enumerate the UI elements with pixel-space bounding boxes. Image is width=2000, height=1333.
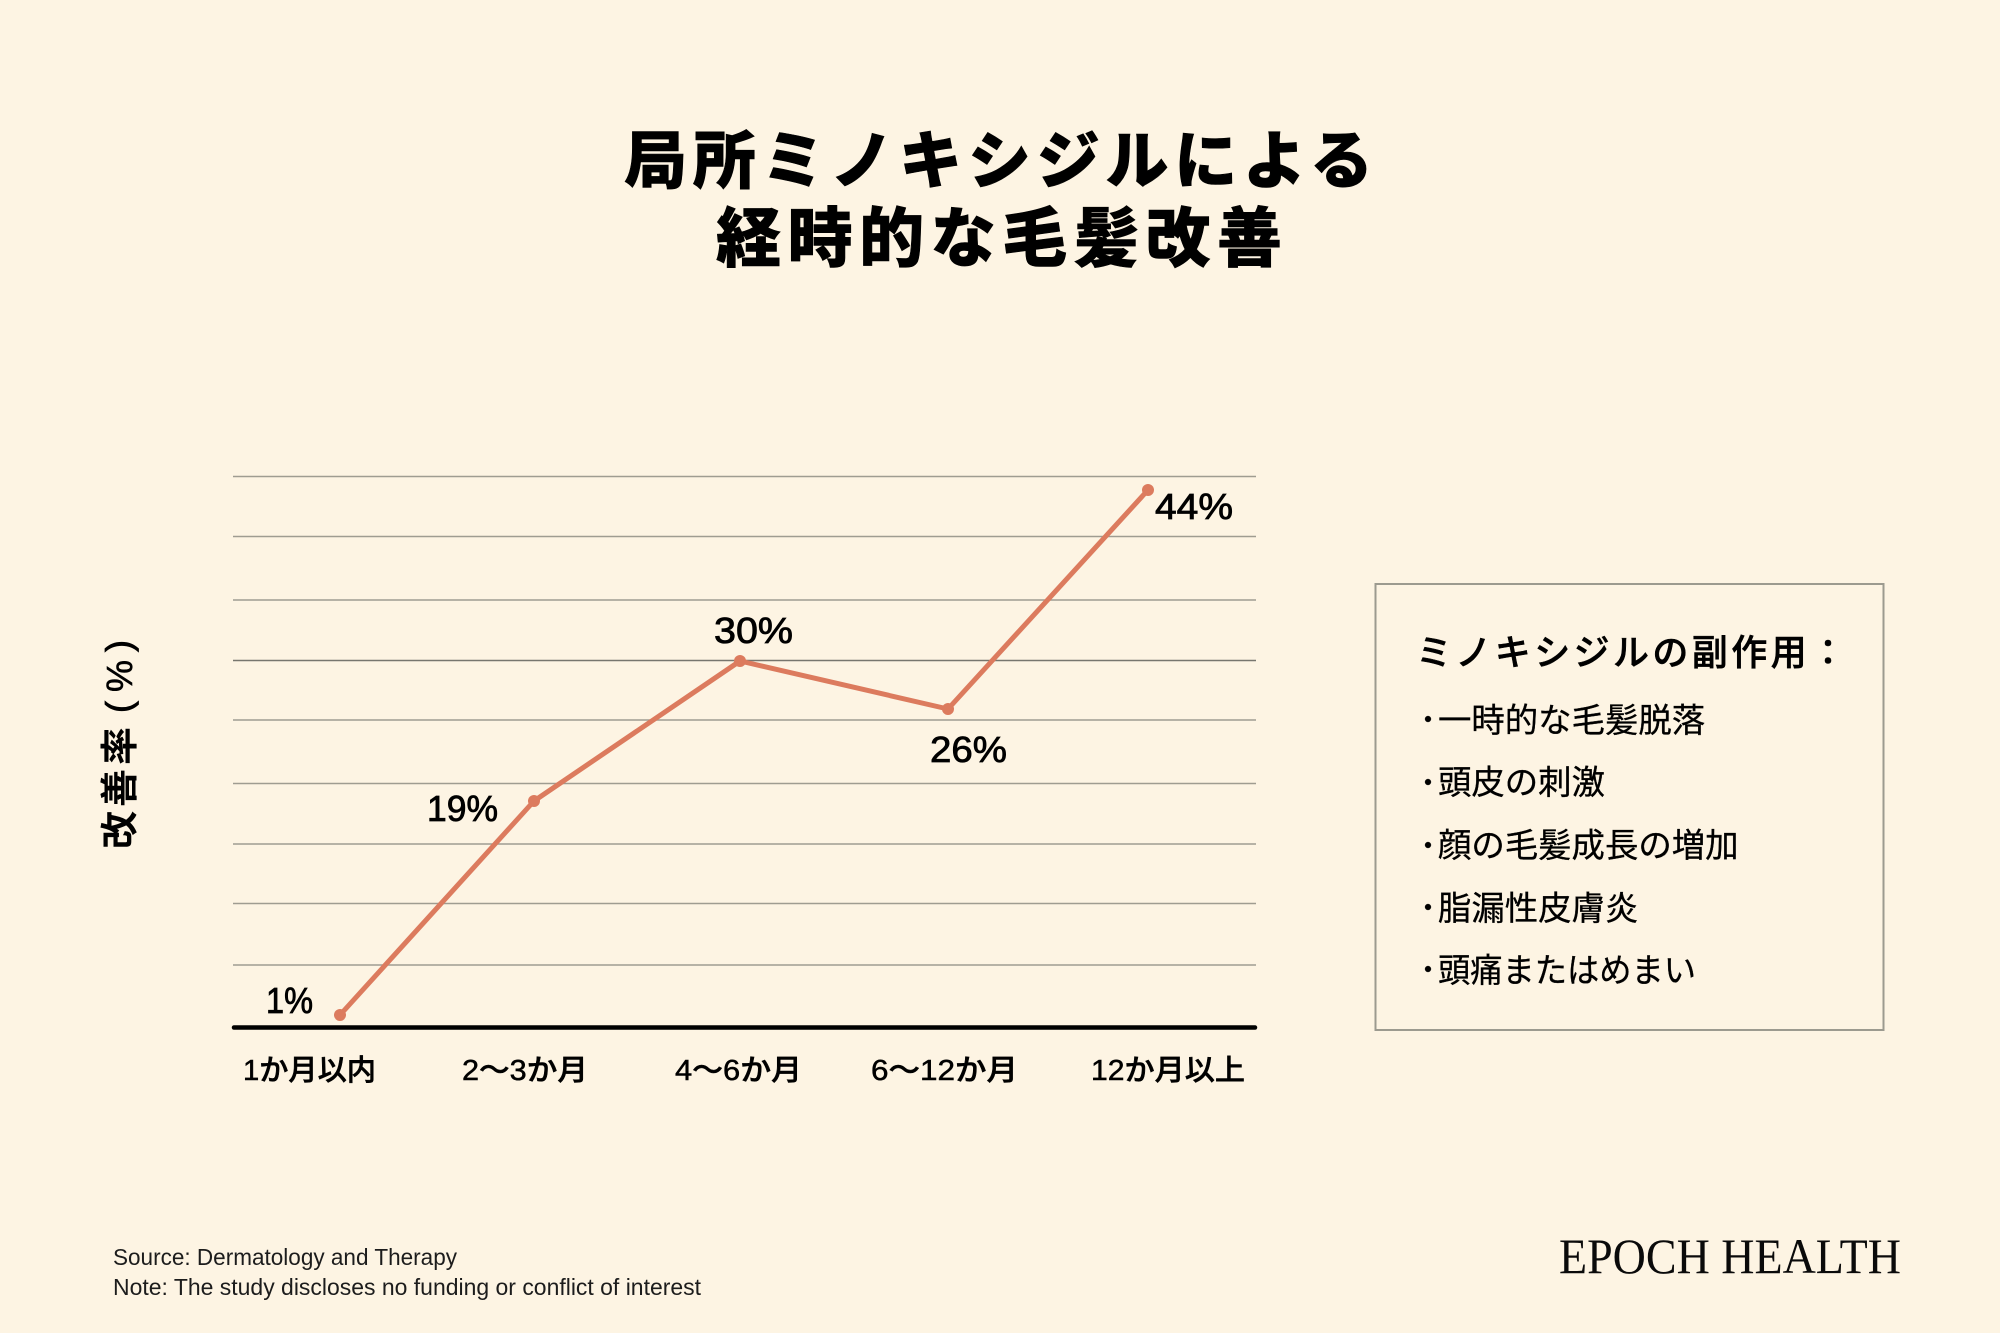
data labels: 26%: [930, 729, 1007, 770]
logo: Epoch Health: EPOCH HEALTH: [1559, 1228, 1901, 1284]
source note: Note: The study discloses no funding or conflict of interest: [113, 1274, 702, 1300]
x axis: [234, 1025, 1255, 1030]
side effect list: 頭皮の刺激: [1438, 755, 1605, 804]
line chart: [233, 476, 1256, 1087]
x-axis category labels: 4～6か月: [675, 1055, 802, 1087]
data labels: 19%: [427, 788, 498, 829]
side effect list: 一時的な毛髪脱落: [1438, 693, 1705, 742]
y-axis label: (: [98, 701, 139, 713]
x-axis category labels: 2～3か月: [462, 1055, 588, 1087]
data labels: 1%: [266, 980, 313, 1021]
source note: [113, 1244, 702, 1300]
side effect list: 頭痛またはめまい: [1438, 943, 1696, 992]
y-axis label: 改善率: [89, 727, 144, 849]
y-axis label: %: [99, 660, 140, 692]
title: 経時的な毛髪改善: [716, 186, 1282, 280]
side effect list: 顔の毛髪成長の増加: [1438, 818, 1739, 867]
data labels: 30%: [714, 610, 793, 651]
title: [624, 111, 1373, 280]
panel: side effects: [1376, 584, 1884, 1030]
data labels: [266, 486, 1233, 1021]
x-axis category labels: 6～12か月: [871, 1055, 1018, 1087]
panel heading: ミノキシジルの副作用：: [1416, 624, 1846, 676]
x-axis category labels: [243, 1054, 1245, 1087]
x-axis category labels: 12か月以上: [1091, 1055, 1245, 1087]
side effect list: 脂漏性皮膚炎: [1438, 881, 1638, 930]
y-axis label: ): [98, 640, 139, 652]
side effect list: [1425, 693, 1739, 992]
y-axis label: [89, 640, 144, 849]
x-axis category labels: 1か月以内: [243, 1054, 376, 1087]
title: 局所ミノキシジルによる: [624, 111, 1373, 202]
data line: [334, 484, 1154, 1021]
data labels: 44%: [1155, 486, 1233, 527]
source note: Source: Dermatology and Therapy: [113, 1244, 457, 1270]
